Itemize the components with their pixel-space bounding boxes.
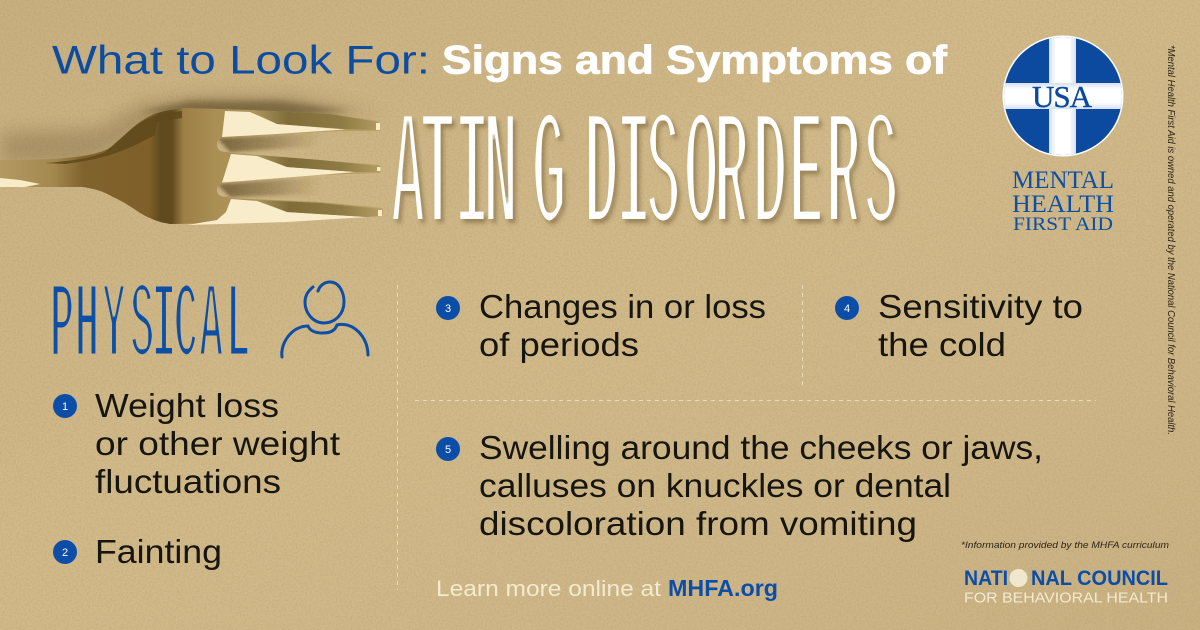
symptom 5: 5 (445, 444, 451, 456)
symptom 1: Weight loss (95, 387, 279, 424)
symptom 3: 3 (445, 303, 451, 315)
logo: Mental Health First Aid USA: FIRST AID (1013, 214, 1113, 235)
logo: Mental Health First Aid USA: USA (1032, 79, 1093, 114)
heading: ating disorders: ATINGDISORDERS (391, 80, 898, 277)
logo: National Council for Behavioral Health (964, 567, 1168, 606)
source note: *Information provided by the MHFA curriculum (961, 540, 1169, 551)
symptom 2 (53, 533, 222, 570)
side note: ownership disclaimer: *Mental Health First Aid is owned and operated by the National Council for Behavioral Health. (1165, 45, 1177, 435)
symptom 1: fluctuations (95, 463, 281, 500)
call to action: MHFA.org (668, 575, 778, 601)
symptom 3 (436, 288, 766, 363)
call to action: Learn more online at (436, 576, 661, 601)
symptom 1: or other weight (95, 425, 340, 462)
symptom 4 (835, 288, 1083, 363)
logo: National Council for Behavioral Health: NAL COUNCIL (1031, 567, 1168, 590)
symptom 1: 1 (62, 401, 68, 413)
symptom 5 (436, 429, 1043, 542)
call to action (436, 575, 778, 601)
title line: What to Look For: (52, 38, 430, 82)
symptom 2: 2 (62, 547, 68, 559)
title line (52, 38, 948, 82)
symptom 4: Sensitivity to (878, 288, 1083, 325)
fork photograph (0, 96, 385, 225)
symptom 2: Fainting (95, 533, 222, 570)
dividers (398, 285, 1096, 590)
symptom 4: the cold (878, 326, 1006, 363)
icon: person (282, 282, 368, 357)
symptom 3: Changes in or loss (479, 288, 766, 325)
heading: physical: PHYSICAL (50, 265, 250, 392)
symptom 4: 4 (844, 303, 850, 315)
symptom 5: calluses on knuckles or dental (479, 467, 951, 504)
symptom 5: Swelling around the cheeks or jaws, (479, 429, 1043, 466)
logo: National Council for Behavioral Health: NATI (964, 567, 1008, 590)
logo: Mental Health First Aid USA: HEALTH (1012, 191, 1114, 218)
symptom 5: discoloration from vomiting (479, 505, 917, 542)
logo: Mental Health First Aid USA (1000, 30, 1126, 235)
symptom 3: of periods (479, 326, 639, 363)
logo: Mental Health First Aid USA: MENTAL (1012, 167, 1114, 194)
title line: Signs and Symptoms of (442, 38, 948, 82)
symptom 1 (53, 387, 340, 500)
logo: National Council for Behavioral Health: FOR BEHAVIORAL HEALTH (964, 590, 1168, 606)
